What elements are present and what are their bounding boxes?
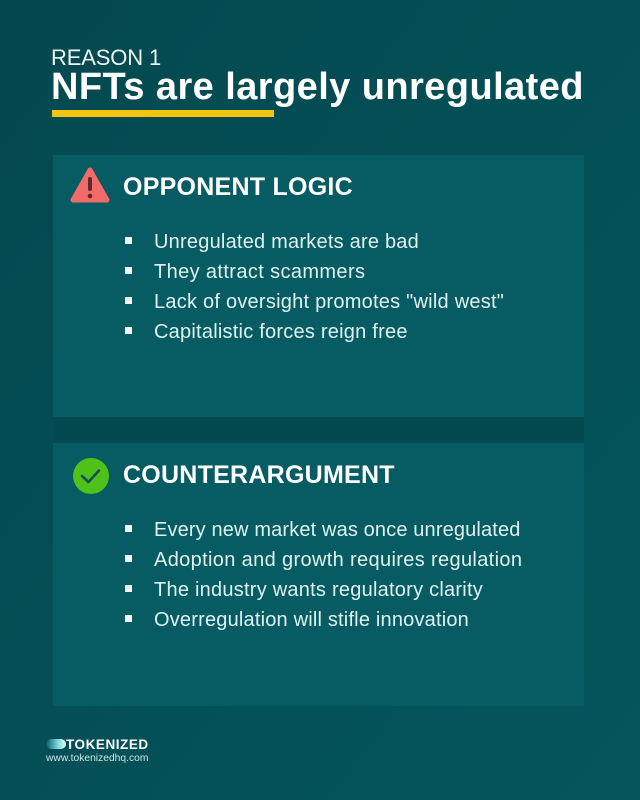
list: opponent points [125,231,504,343]
logo: tokenized [46,737,149,752]
icon: check [73,458,109,494]
title underline [52,110,274,117]
icon: warning [70,168,110,202]
list: counter points [125,519,522,631]
logo word: TOKENIZED [66,737,149,752]
point 4: Capitalistic forces reign free [154,321,408,343]
point 3: Lack of oversight promotes "wild west" [154,291,504,313]
website: www.tokenizedhq.com [46,753,148,764]
counter point 1: Every new market was once unregulated [154,519,520,541]
counter point 3: The industry wants regulatory clarity [154,579,483,601]
heading: counterargument: COUNTERARGUMENT [123,461,395,489]
counter point 4: Overregulation will stifle innovation [154,609,469,631]
heading: opponent logic: OPPONENT LOGIC [123,173,353,201]
panel: opponent logic [53,155,584,417]
logo mark [46,739,66,749]
point 1: Unregulated markets are bad [154,231,419,253]
counter point 2: Adoption and growth requires regulation [154,549,522,571]
subtitle: REASON 1 [51,45,161,70]
panel: counterargument [53,443,584,706]
title: NFTs are largely unregulated [51,66,584,108]
point 2: They attract scammers [154,261,365,283]
